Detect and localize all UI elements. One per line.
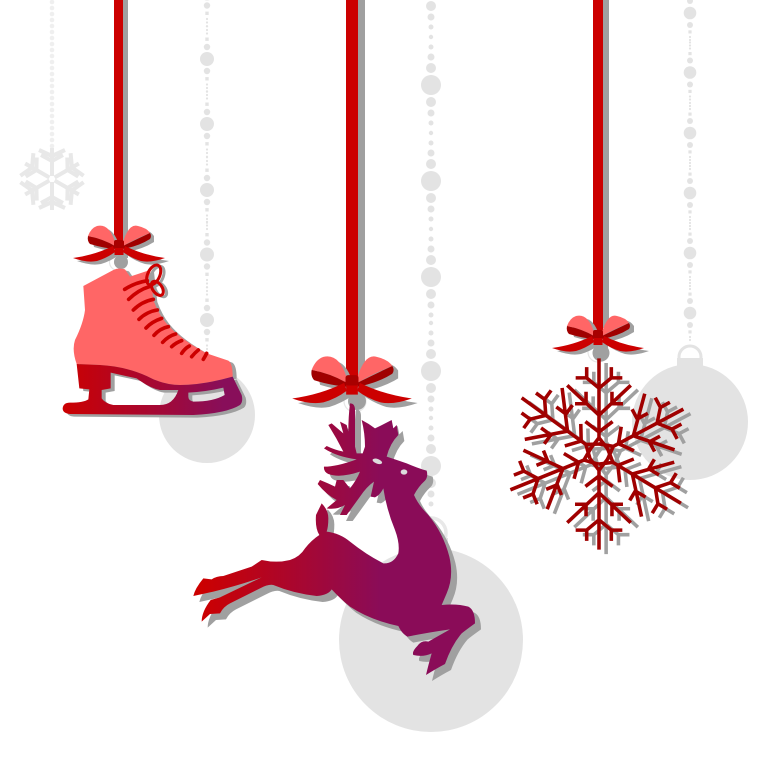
skate laces <box>125 263 207 359</box>
ornament: reindeer <box>193 0 481 681</box>
strand: small bead column above faint snowflake <box>50 0 54 148</box>
reindeer ear spot <box>372 457 383 465</box>
icon: snowflake bow <box>552 316 649 355</box>
reindeer eye <box>401 469 407 475</box>
ornament: ice skate <box>63 0 246 418</box>
icon: reindeer bow <box>292 356 418 408</box>
ribbon: reindeer <box>346 0 365 384</box>
ribbon: snowflake <box>593 0 609 334</box>
icon: skate bow <box>73 226 169 265</box>
strand: beads behind skate <box>200 0 214 354</box>
ornament: red snowflake <box>498 0 705 554</box>
bauble: grey ball behind skate <box>159 367 255 463</box>
bauble: grey ball behind snowflake <box>632 346 748 480</box>
bauble: large grey ball behind reindeer <box>339 518 523 732</box>
icon: reindeer hanging ring <box>344 390 366 412</box>
icon: snowflake hanging ring <box>588 342 610 362</box>
icon: skate hanging ring <box>110 254 128 270</box>
reindeer silhouette <box>193 403 481 681</box>
icon: faint snowflake <box>19 148 85 210</box>
strand: beads behind snowflake <box>684 0 696 341</box>
snowflake shape <box>498 358 705 554</box>
skate boot and blade <box>63 263 246 418</box>
ribbon: skate <box>114 0 128 245</box>
strand: beads behind reindeer <box>421 0 441 507</box>
